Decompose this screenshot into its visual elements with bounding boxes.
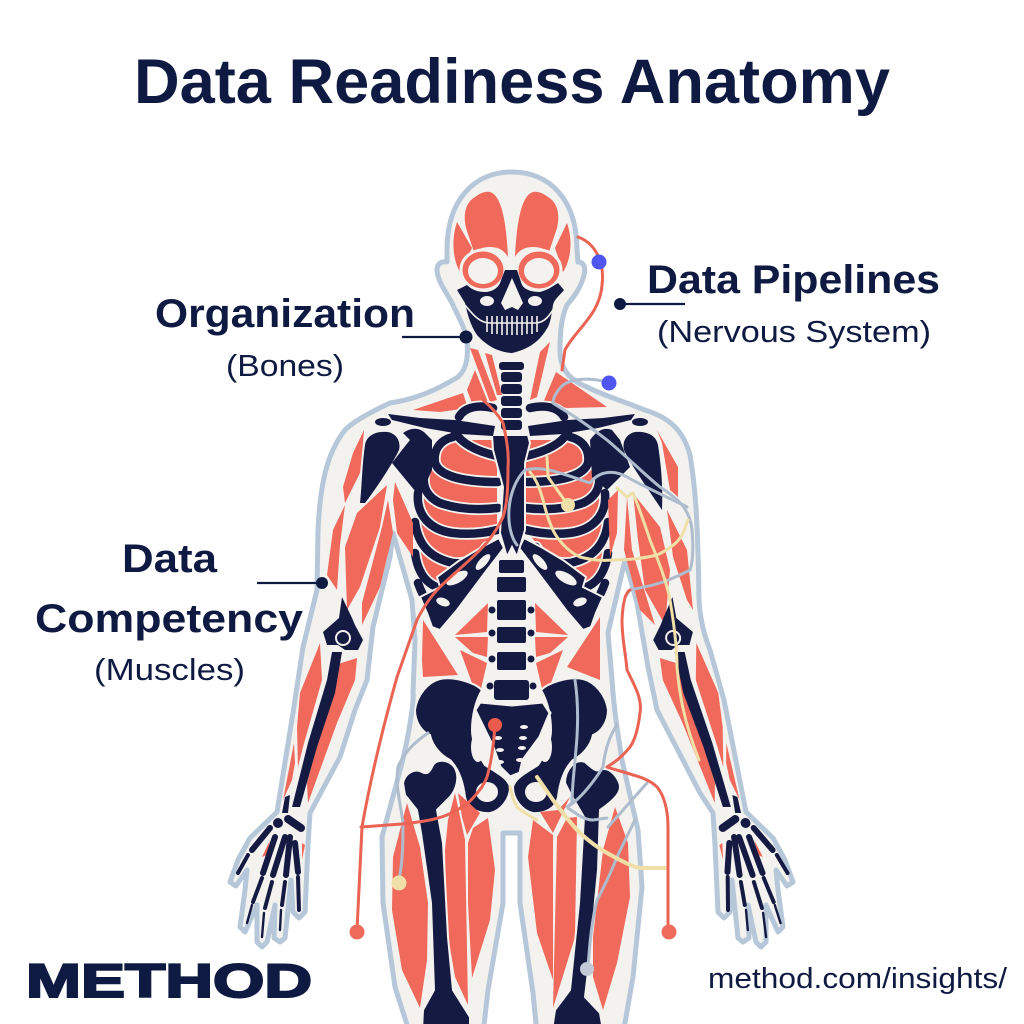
label: organization: Organization	[155, 292, 415, 336]
eye holes	[468, 258, 554, 284]
label: organization: (Bones)	[226, 348, 344, 383]
skull	[457, 270, 564, 353]
femurs	[403, 761, 620, 1024]
rib cage muscles	[415, 440, 608, 605]
elbow ball	[336, 631, 350, 645]
neck and shoulder muscles	[413, 342, 607, 412]
rib bones	[415, 407, 608, 615]
forearm muscles	[262, 643, 357, 860]
red data wires	[357, 237, 668, 930]
label: data pipelines: (Nervous System)	[657, 314, 931, 349]
left forearm and hand	[238, 597, 363, 937]
wire nodes	[350, 254, 676, 976]
lumbar spine	[486, 560, 536, 700]
label: data competency: Data	[122, 537, 218, 581]
neck vertebrae	[499, 362, 524, 430]
sternum	[492, 435, 530, 557]
hip holes	[471, 732, 552, 802]
label: organization	[155, 292, 472, 383]
upper arm muscles	[327, 430, 693, 625]
label: data pipelines: Data Pipelines	[647, 258, 940, 302]
cream data wires	[510, 457, 699, 868]
abdominal muscles	[422, 603, 600, 693]
label: data competency: (Muscles)	[94, 652, 245, 687]
eye rings	[461, 250, 561, 290]
website url: method.com/insights/	[708, 963, 1008, 995]
teeth	[465, 305, 556, 335]
title: Data Readiness Anatomy	[134, 47, 890, 117]
hand bones	[238, 818, 301, 937]
thigh muscles	[392, 793, 630, 1010]
sacrum	[475, 702, 550, 777]
grey data wires	[397, 379, 693, 967]
head muscles	[453, 192, 570, 290]
lower costal cartilage	[420, 538, 603, 630]
label: data competency	[35, 537, 328, 687]
pelvis	[415, 678, 608, 813]
elbow	[323, 597, 363, 650]
shoulder bones	[360, 429, 662, 510]
right forearm and hand	[651, 597, 790, 937]
label: data pipelines	[614, 258, 940, 349]
logo: METHOD	[26, 954, 312, 1007]
forearm bones	[282, 652, 342, 813]
clavicles	[375, 414, 648, 436]
body silhouette	[230, 172, 793, 1024]
nose	[501, 278, 523, 310]
cheek holes	[480, 296, 542, 306]
label: data competency: Competency	[35, 597, 304, 641]
